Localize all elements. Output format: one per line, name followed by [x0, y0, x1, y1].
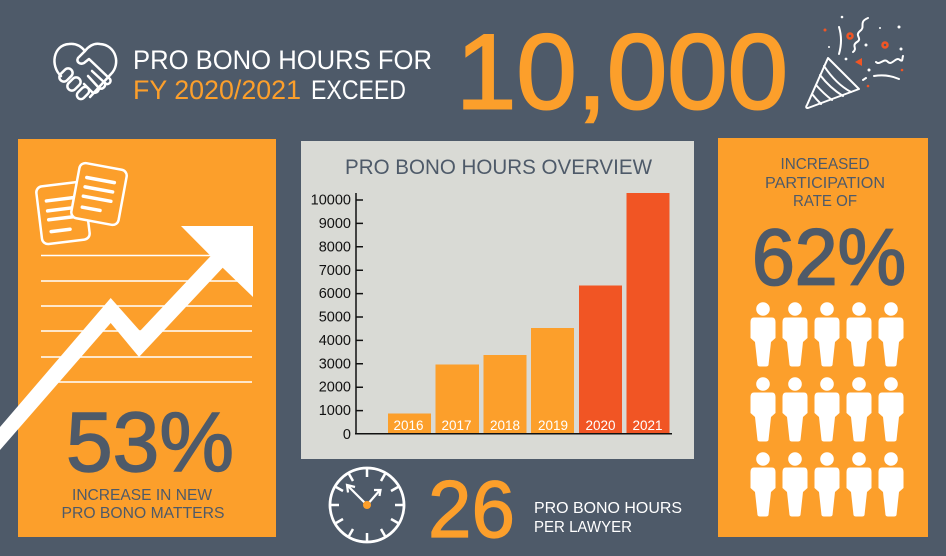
big number: 10,000: [456, 12, 788, 132]
axis labels: 3000: [319, 356, 351, 372]
axis labels: 2000: [319, 380, 351, 396]
bars: [388, 193, 670, 434]
axis labels: 6000: [319, 286, 351, 302]
axis labels: 10000: [311, 192, 351, 208]
axes: [355, 193, 672, 434]
panel: participation: [718, 138, 928, 537]
chart title: PRO BONO HOURS OVERVIEW: [345, 155, 653, 179]
arrow: [0, 226, 253, 450]
heading: [133, 45, 432, 105]
icon: party popper: [806, 16, 903, 108]
axis labels: 1000: [319, 403, 351, 419]
caption: [62, 487, 224, 522]
axis labels: 4000: [319, 333, 351, 349]
caption: hours per lawyer: [534, 500, 682, 536]
panel: new matters: [0, 139, 276, 537]
bar labels: 2016: [393, 418, 424, 433]
axis labels: 5000: [319, 310, 351, 326]
caption: INCREASED: [780, 156, 870, 173]
bar labels: 2021: [632, 418, 663, 433]
heading: EXCEED: [311, 75, 406, 105]
bar labels: 2020: [585, 418, 616, 433]
stat 26: 26: [428, 465, 515, 555]
caption: PARTICIPATION: [765, 175, 885, 192]
caption: [765, 156, 885, 210]
axis labels: 0: [343, 427, 351, 443]
axis labels: 9000: [319, 216, 351, 232]
icon: clock: [330, 468, 404, 542]
bar labels: 2019: [538, 418, 568, 433]
heading: PRO BONO HOURS FOR: [133, 45, 432, 75]
chart lines: [41, 256, 252, 382]
stat 53%: 53%: [66, 395, 234, 489]
axis labels: [311, 192, 351, 443]
caption: hours per lawyer: PRO BONO HOURS: [534, 500, 682, 517]
caption: hours per lawyer: PER LAWYER: [534, 519, 632, 536]
icon: handshake heart: [54, 44, 116, 101]
axis labels: 7000: [319, 263, 351, 279]
bar labels: [393, 418, 663, 433]
caption: RATE OF: [793, 193, 857, 210]
bar labels: 2017: [441, 418, 472, 433]
people icons: [750, 302, 904, 516]
icon: documents: [36, 162, 128, 245]
bar labels: 2018: [490, 418, 520, 433]
caption: PRO BONO MATTERS: [62, 505, 224, 522]
stat 62%: 62%: [752, 212, 906, 302]
caption: INCREASE IN NEW: [72, 487, 212, 504]
panel: overview chart: [301, 141, 694, 459]
axis labels: 8000: [319, 240, 351, 256]
heading: FY 2020/2021: [133, 75, 301, 105]
